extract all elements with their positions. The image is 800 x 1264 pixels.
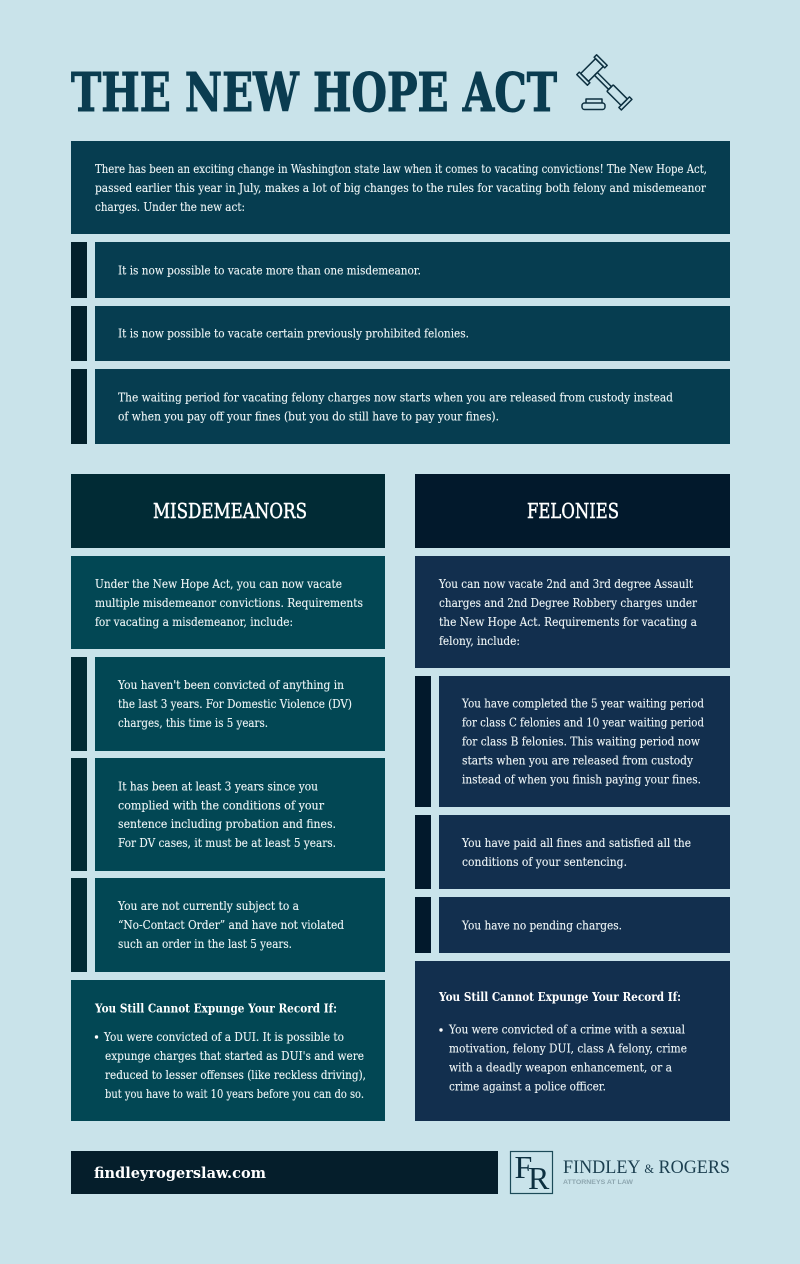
felony exclusions: crime against a police officer. [449, 1078, 606, 1094]
heading: misdemeanors: MISDEMEANORS [153, 499, 307, 523]
felonies intro: felony, include: [439, 633, 520, 648]
misdemeanor exclusions: You were convicted of a DUI. It is possible to [103, 1029, 344, 1044]
misdemeanors intro: Under the New Hope Act, you can now vacate [95, 576, 342, 591]
felony requirement 2: conditions of your sentencing. [462, 854, 627, 869]
change item 1: It is now possible to vacate more than one misdemeanor. [118, 262, 421, 278]
misdemeanors intro: for vacating a misdemeanor, include: [95, 614, 293, 629]
felony requirement 2: You have paid all fines and satisfied all the [461, 835, 691, 850]
felonies intro: charges and 2nd Degree Robbery charges under [439, 595, 697, 610]
change item 3 [71, 369, 730, 444]
panel: introduction [71, 141, 730, 234]
misdemeanor requirement 2: complied with the conditions of your [118, 798, 324, 812]
icon: gavel [577, 55, 637, 115]
panel: felonies column [415, 474, 730, 1121]
felony exclusions: with a deadly weapon enhancement, or a [449, 1060, 672, 1074]
felony exclusions: motivation, felony DUI, class A felony, crime [449, 1040, 687, 1056]
change item 3: The waiting period for vacating felony charges now starts when you are released from custody instead [118, 390, 673, 404]
felony requirement 1: for class B felonies. This waiting period now [462, 734, 700, 748]
misdemeanor requirement 2: sentence including probation and fines. [118, 816, 336, 831]
misdemeanor requirement 1: the last 3 years. For Domestic Violence (DV) [118, 696, 352, 711]
misdemeanor requirement 2: For DV cases, it must be at least 5 years. [118, 835, 336, 850]
change item 1 [71, 242, 730, 298]
logo mark [510, 1149, 552, 1196]
misdemeanor exclusions: but you have to wait 10 years before you can do so. [105, 1086, 364, 1101]
felony exclusions: You were convicted of a crime with a sexual [448, 1022, 685, 1036]
misdemeanor requirement 3: “No-Contact Order” and have not violated [118, 917, 344, 932]
logo: Findley and Rogers [510, 1149, 730, 1196]
felonies intro: the New Hope Act. Requirements for vacating a [439, 614, 697, 629]
misdemeanor exclusions [71, 980, 385, 1121]
felony requirement 1: instead of when you finish paying your fines. [462, 772, 701, 786]
change item 3: of when you pay off your fines (but you do still have to pay your fines). [118, 408, 499, 424]
panel: introduction: passed earlier this year in July, makes a lot of big changes to the rules for vacating both felony and misdemeanor [95, 180, 706, 195]
change item 2 [71, 306, 730, 361]
misdemeanor requirement 3: such an order in the last 5 years. [118, 936, 292, 951]
felonies intro [415, 556, 730, 668]
heading: misdemeanors [71, 474, 385, 548]
misdemeanor requirement 3: You are not currently subject to a [117, 898, 299, 913]
logo mark: R [528, 1160, 550, 1196]
misdemeanor requirement 1: You haven't been convicted of anything in [117, 677, 344, 692]
felony requirement 1 [415, 676, 730, 807]
change item 2: It is now possible to vacate certain previously prohibited felonies. [118, 326, 469, 340]
felony requirement 3 [415, 897, 730, 953]
misdemeanors intro: multiple misdemeanor convictions. Requirements [95, 595, 363, 610]
logo mark: F [514, 1149, 532, 1185]
misdemeanor exclusions: expunge charges that started as DUI's and were [105, 1048, 364, 1063]
misdemeanor requirement 1 [71, 657, 385, 751]
felony requirement 3: You have no pending charges. [461, 918, 622, 932]
firm tagline: ATTORNEYS AT LAW [563, 1179, 634, 1186]
felony requirement 1: starts when you are released from custody [462, 752, 694, 768]
title: THE NEW HOPE ACT [71, 61, 557, 124]
felony requirement 1: You have completed the 5 year waiting period [461, 696, 704, 710]
misdemeanor requirement 2 [71, 758, 385, 871]
heading: felonies: FELONIES [527, 499, 619, 523]
misdemeanors intro [71, 556, 385, 649]
felony exclusions: You Still Cannot Expunge Your Record If: [438, 989, 681, 1004]
felony requirement 1: for class C felonies and 10 year waiting period [462, 714, 704, 730]
footer: website bar [71, 1151, 498, 1194]
firm name: FINDLEY & ROGERS [563, 1157, 730, 1178]
misdemeanor exclusions: reduced to lesser offenses (like reckless driving), [105, 1067, 366, 1082]
felony exclusions [415, 961, 730, 1121]
misdemeanor requirement 3 [71, 878, 385, 972]
felonies intro: You can now vacate 2nd and 3rd degree Assault [438, 576, 693, 591]
felony requirement 2 [415, 815, 730, 889]
panel: introduction: charges. Under the new act: [95, 199, 245, 214]
panel: misdemeanors column [71, 474, 385, 1121]
misdemeanor exclusions: You Still Cannot Expunge Your Record If: [94, 1000, 337, 1016]
heading: felonies [415, 474, 730, 548]
footer: website bar: findleyrogerslaw.com [94, 1165, 267, 1182]
misdemeanor requirement 2: It has been at least 3 years since you [118, 778, 318, 794]
misdemeanor requirement 1: charges, this time is 5 years. [118, 715, 268, 730]
